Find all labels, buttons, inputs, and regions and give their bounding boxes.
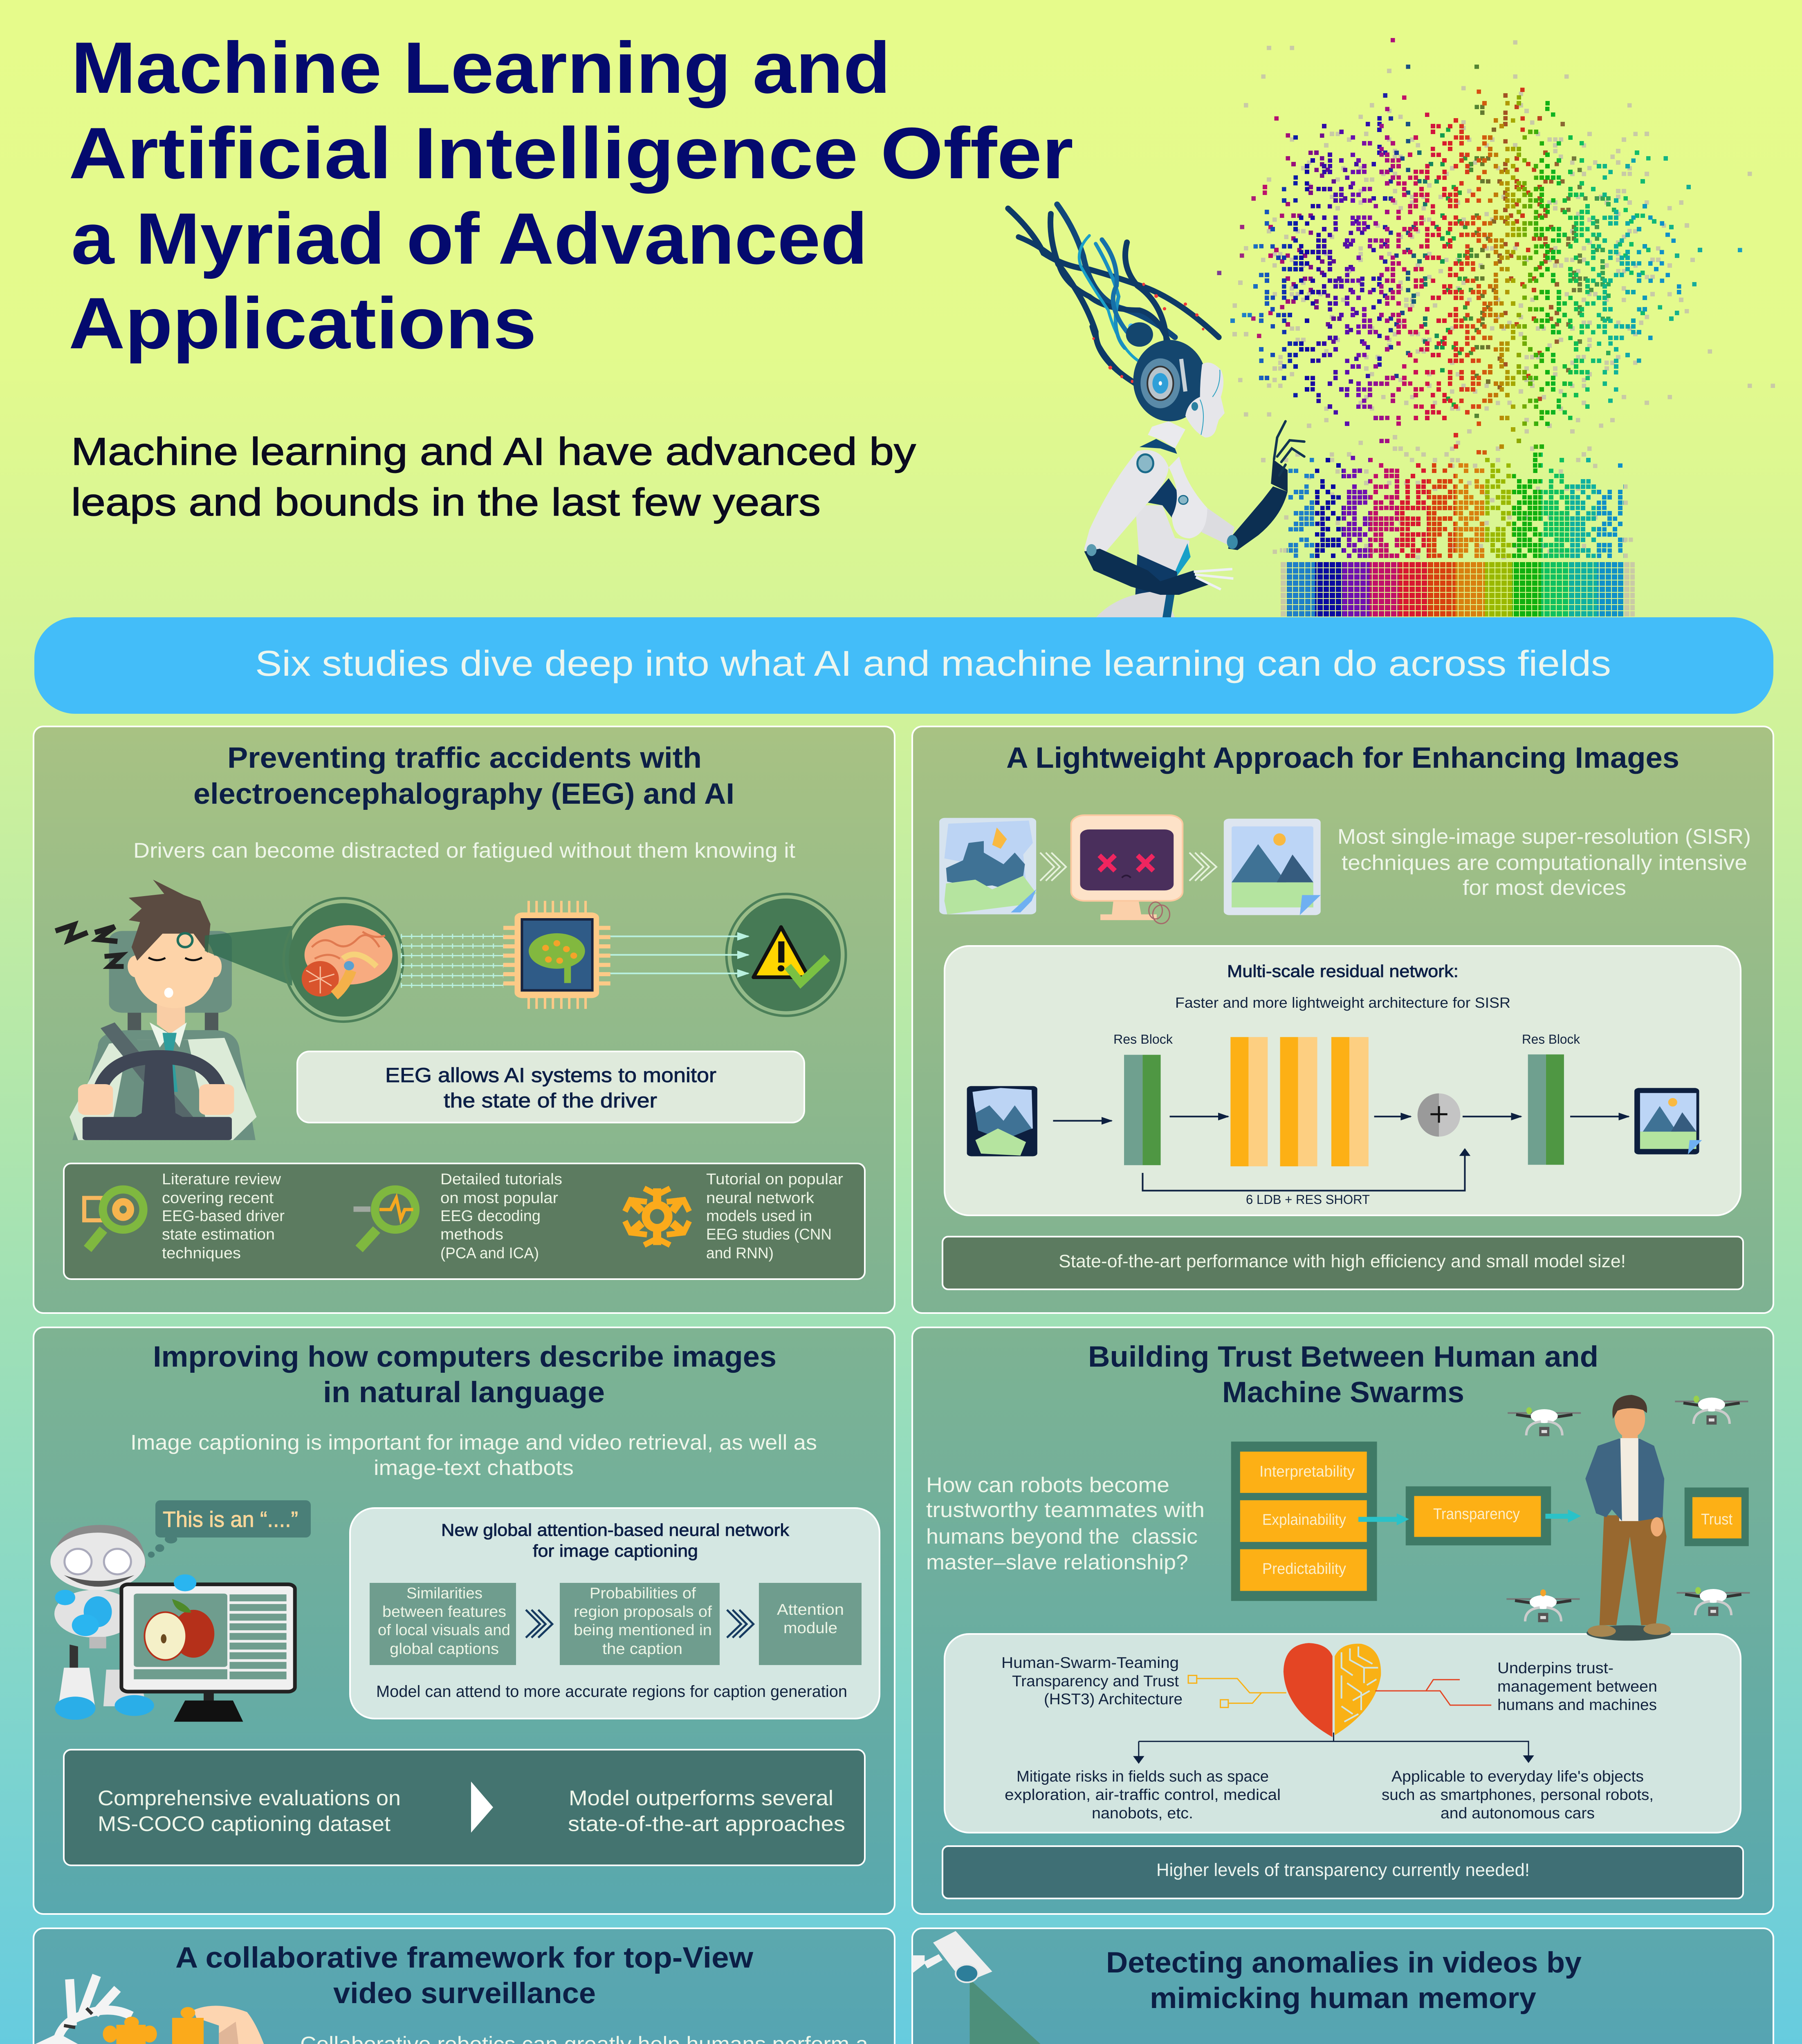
icon: AI chip <box>503 901 610 1009</box>
text: SISR: for most devices <box>1463 876 1626 900</box>
heading: A collaborative framework for top-View <box>175 1941 754 1974</box>
text: detailed tutorials: Detailed tutorials <box>440 1171 562 1188</box>
text: mitigate: nanobots, etc. <box>1092 1805 1193 1822</box>
heading: electroencephalography (EEG) and AI <box>193 778 734 810</box>
box: probabilities: the caption <box>602 1641 682 1658</box>
labels: Transparency <box>1433 1506 1520 1523</box>
heading: in natural language <box>323 1376 605 1409</box>
title: Applications <box>69 282 536 364</box>
panel: top view surveillance <box>34 1928 895 2044</box>
icon: robot with monitor <box>50 1525 295 1722</box>
text: question <box>926 1473 1205 1574</box>
subtitle: leaps and bounds in the last few years <box>71 481 821 524</box>
callout: EEG allows AI <box>297 1051 804 1123</box>
text: HST3: (HST3) Architecture <box>1044 1691 1183 1708</box>
text: literature review: techniques <box>162 1245 241 1262</box>
heading: Preventing traffic accidents with <box>227 742 702 774</box>
icon: standing man <box>1585 1395 1671 1641</box>
heading: video surveillance <box>333 1977 596 2010</box>
icon: signal waves <box>401 936 503 985</box>
box: probabilities <box>560 1583 720 1665</box>
labels: Res Block <box>1113 1032 1173 1047</box>
text: SISR <box>1337 825 1751 900</box>
labels: Trust <box>1701 1511 1732 1528</box>
heading: mimicking human memory <box>1150 1982 1536 2015</box>
callout: state of the art <box>943 1237 1743 1289</box>
heading: multi-scale: Multi-scale residual network: <box>1227 961 1459 981</box>
box: similarities: between features <box>382 1603 506 1620</box>
panel: human machine swarms <box>912 1327 1773 1914</box>
box: probabilities: Probabilities of <box>590 1585 696 1602</box>
text: underpins: Underpins trust- <box>1497 1660 1613 1677</box>
title: Artificial Intelligence Offer <box>69 112 1073 194</box>
panel: multi-scale residual network diagram <box>945 946 1741 1215</box>
heading <box>1088 1340 1598 1409</box>
callout: evaluations <box>64 1750 865 1865</box>
text: neural tutorial: and RNN) <box>706 1245 774 1262</box>
text: applicable: Applicable to everyday life's objects <box>1391 1768 1644 1785</box>
text: SISR: Most single-image super-resolution (SISR) <box>1337 825 1751 849</box>
heading: A Lightweight Approach for Enhancing Images <box>1006 742 1679 774</box>
text: neural tutorial: EEG studies (CNN <box>706 1226 832 1243</box>
text: literature review: Literature review <box>162 1171 281 1188</box>
icon: sleepy driver <box>56 880 292 1140</box>
icon: broken image <box>939 818 1036 914</box>
text: neural tutorial: Tutorial on popular <box>706 1171 843 1188</box>
text: question: trustworthy teammates with <box>926 1498 1205 1522</box>
panel: anomaly detection <box>912 1928 1773 2044</box>
icon: chevrons <box>526 1610 552 1638</box>
box: similarities: global captions <box>390 1641 499 1658</box>
text: SISR: techniques are computationally intensive <box>1342 851 1747 875</box>
text: question: How can robots become <box>926 1473 1169 1497</box>
text: detailed tutorials: (PCA and ICA) <box>440 1245 539 1262</box>
text: image captioning <box>130 1431 817 1480</box>
text: detailed tutorials <box>440 1171 562 1262</box>
text: HST3 <box>1001 1654 1183 1708</box>
callout: EEG allows AI: the state of the driver <box>444 1089 657 1112</box>
heading: Machine Swarms <box>1222 1376 1464 1409</box>
box: probabilities: region proposals of <box>574 1603 712 1620</box>
icon: warning and check <box>726 894 846 1016</box>
text: drivers: Drivers can become distracted or fatigued without them knowing it <box>133 839 796 863</box>
text: mitigate <box>1005 1768 1281 1822</box>
speech bubble: This is an “....” <box>163 1507 298 1532</box>
callout: higher levels: Higher levels of transparency currently needed! <box>1156 1860 1530 1880</box>
text: underpins: humans and machines <box>1497 1697 1657 1714</box>
text: literature review: EEG-based driver <box>162 1208 285 1225</box>
icon: magnifier gear <box>84 1190 144 1249</box>
labels: 6 LDB + RES SHORT <box>1246 1192 1370 1207</box>
banner: six studies <box>34 617 1773 714</box>
heading: new global <box>441 1520 790 1560</box>
text: neural tutorial <box>706 1171 843 1262</box>
heading: Building Trust Between Human and <box>1088 1340 1598 1373</box>
text: detailed tutorials: methods <box>440 1226 503 1243</box>
neck and torso <box>1148 421 1185 448</box>
heading <box>153 1340 776 1409</box>
labels <box>1259 1463 1732 1578</box>
text: neural tutorial: models used in <box>706 1208 812 1225</box>
icon: robot woman <box>1008 204 1304 618</box>
box: similarities: Similarities <box>406 1585 482 1602</box>
panel: global attention network <box>350 1508 880 1719</box>
heading <box>1106 1946 1582 2015</box>
box: attention module: module <box>783 1620 837 1637</box>
callout: evaluations: Comprehensive evaluations on <box>98 1786 401 1810</box>
network blocks <box>967 1037 1702 1191</box>
icon: neural network <box>625 1188 689 1245</box>
box: probabilities: being mentioned in <box>574 1622 712 1639</box>
labels: Interpretability <box>1259 1463 1355 1480</box>
text: applicable <box>1382 1768 1654 1822</box>
labels: Res Block <box>1522 1032 1580 1047</box>
heading: Improving how computers describe images <box>153 1340 776 1373</box>
text: mitigate: Mitigate risks in fields such as space <box>1017 1768 1269 1785</box>
diagram: transparency boxes <box>1231 1441 1749 1601</box>
callout: evaluations: state-of-the-art approaches <box>568 1812 845 1836</box>
callout: evaluations: MS-COCO captioning dataset <box>98 1812 391 1836</box>
icon: robot and human hands with puzzle <box>34 1975 298 2044</box>
icon: drones <box>1506 1396 1750 1622</box>
icon: half human half circuit heart <box>1139 1643 1528 1763</box>
icon: brain in circle <box>284 898 403 1022</box>
subtitle <box>71 430 916 524</box>
text: image captioning: image-text chatbots <box>374 1456 574 1480</box>
text: question: humans beyond the classic <box>926 1525 1198 1549</box>
text: detailed tutorials: on most popular <box>440 1190 558 1207</box>
head <box>1133 340 1206 421</box>
panel: lightweight image enhancement <box>912 726 1773 1313</box>
icon: magnifier pulse <box>354 1190 415 1249</box>
icon: chevrons <box>727 1610 754 1638</box>
text: model attends: Model can attend to more accurate regions for caption generation <box>376 1683 847 1701</box>
lower arm and hand <box>1084 549 1210 595</box>
icon: chevrons left <box>1040 853 1066 881</box>
text: HST3: Human-Swarm-Teaming <box>1001 1654 1179 1672</box>
panel: HST3 architecture <box>945 1634 1741 1833</box>
text: literature review: covering recent <box>162 1190 274 1207</box>
text: underpins: management between <box>1497 1678 1657 1695</box>
box: similarities <box>370 1583 516 1665</box>
box: attention module <box>759 1583 862 1665</box>
box: attention module: Attention <box>777 1601 844 1618</box>
heading <box>175 1941 754 2010</box>
heading: new global: New global attention-based neural network <box>441 1520 790 1540</box>
panel: EEG traffic accidents <box>34 726 895 1313</box>
title: a Myriad of Advanced <box>71 198 868 279</box>
title: Machine Learning and <box>71 27 891 108</box>
callout: evaluations: Model outperforms several <box>569 1786 833 1810</box>
text: underpins <box>1497 1660 1657 1714</box>
text: neural tutorial: neural network <box>706 1190 815 1207</box>
speech bubble <box>155 1500 311 1537</box>
text: mitigate: exploration, air-traffic control, medical <box>1005 1786 1281 1804</box>
callout: EEG allows AI: EEG allows AI systems to monitor <box>385 1064 716 1087</box>
text: literature review <box>162 1171 285 1262</box>
text: applicable: and autonomous cars <box>1441 1805 1595 1822</box>
heading <box>193 742 734 810</box>
text: HST3: Transparency and Trust <box>1012 1673 1179 1690</box>
callout: higher levels <box>943 1846 1743 1898</box>
labels: Predictability <box>1262 1560 1346 1578</box>
callout: state of the art: State-of-the-art performance with high efficiency and small model size! <box>1059 1251 1626 1271</box>
labels: Explainability <box>1262 1511 1346 1529</box>
text: detailed tutorials: EEG decoding <box>440 1208 541 1225</box>
hair cables <box>1008 204 1219 386</box>
text: question: master–slave relationship? <box>926 1551 1188 1574</box>
panel: image captioning <box>34 1327 895 1914</box>
text: image captioning: Image captioning is important for image and video retrieval, as well as <box>130 1431 817 1455</box>
icon: chevrons right <box>1189 853 1216 881</box>
labels <box>1113 1032 1580 1207</box>
subtitle: Machine learning and AI have advanced by <box>71 430 916 473</box>
icon: clean image <box>1224 819 1321 915</box>
box: similarities: of local visuals and <box>378 1622 510 1639</box>
heading: Detecting anomalies in videos by <box>1106 1946 1582 1979</box>
arrows to warning <box>610 936 748 973</box>
pixel cloud illustration <box>1112 0 1802 619</box>
text: faster: Faster and more lightweight architecture for SISR <box>1175 994 1510 1011</box>
banner: six studies: Six studies dive deep into what AI and machine learning can do across fields <box>255 643 1611 684</box>
icon: security camera and beam <box>912 1931 1221 2044</box>
icon: dead monitor <box>1071 815 1183 923</box>
raised arm and hand <box>1228 486 1288 550</box>
title <box>69 27 1073 364</box>
text: literature review: state estimation <box>162 1226 275 1243</box>
heading: new global: for image captioning <box>533 1541 698 1560</box>
text: applicable: such as smartphones, personal robots, <box>1382 1786 1654 1804</box>
panel: EEG summary box <box>64 1163 865 1279</box>
